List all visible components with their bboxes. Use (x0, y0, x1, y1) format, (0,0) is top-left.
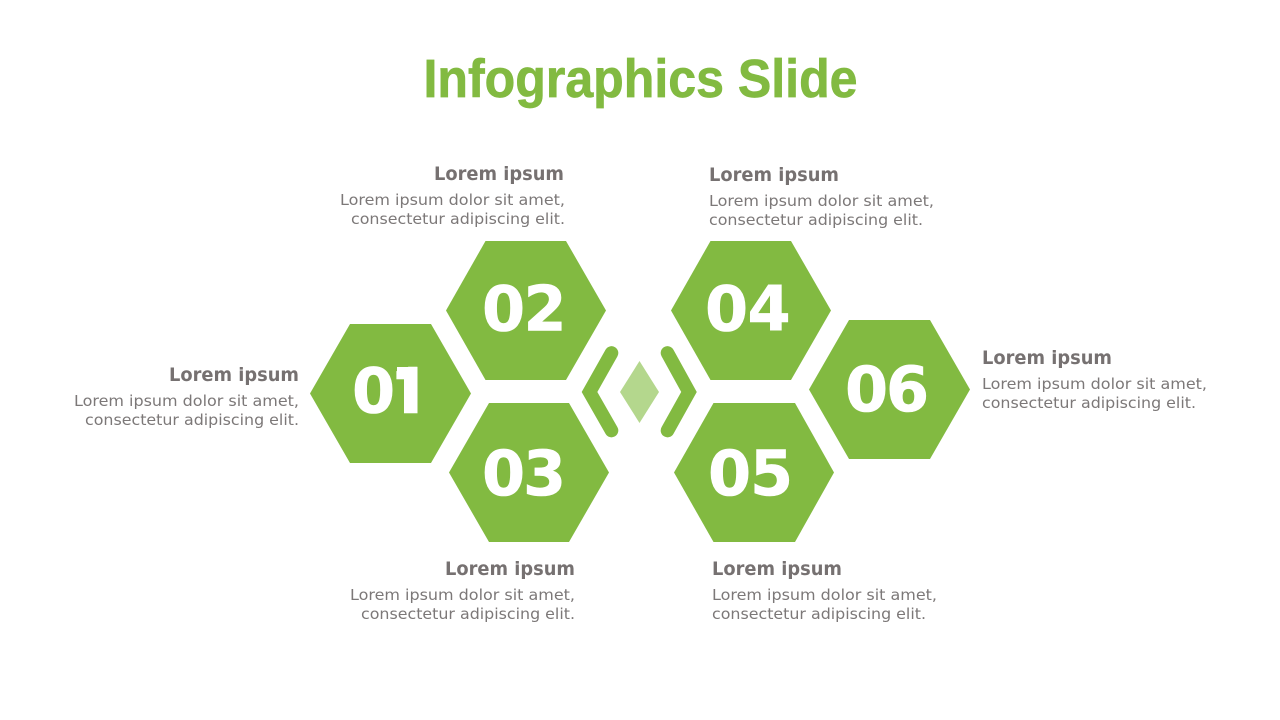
text block 03 (350, 559, 575, 623)
text block 05: Lorem ipsum (712, 559, 842, 580)
left chevron (590, 353, 612, 430)
text block 06: Lorem ipsum (982, 348, 1112, 369)
text block 06: Lorem ipsum dolor sit amet, (982, 375, 1207, 393)
text block 02: consectetur adipiscing elit. (351, 210, 565, 228)
text block 06: consectetur adipiscing elit. (982, 394, 1196, 412)
hexagon 06 (809, 320, 970, 459)
text block 02: Lorem ipsum (434, 164, 564, 185)
text block 04: Lorem ipsum (709, 165, 839, 186)
text block 01: Lorem ipsum dolor sit amet, (74, 392, 299, 410)
right chevron (668, 353, 689, 430)
hexagon 04 (671, 241, 831, 380)
text block 03: consectetur adipiscing elit. (361, 605, 575, 623)
text block 03: Lorem ipsum dolor sit amet, (350, 586, 575, 604)
text block 06 (982, 348, 1207, 412)
text block 04 (709, 165, 934, 229)
text block 01: consectetur adipiscing elit. (85, 411, 299, 429)
hexagon 02: 02 (482, 272, 567, 346)
hexagon 01 (310, 324, 471, 463)
hexagon 03: 03 (482, 437, 566, 510)
hexagon 01: 0 (352, 354, 395, 428)
hexagon 04: 04 (705, 272, 791, 346)
text block 01 (74, 365, 299, 429)
text block 05: consectetur adipiscing elit. (712, 605, 926, 623)
hexagon 03 (449, 403, 609, 542)
text block 01: Lorem ipsum (169, 365, 299, 386)
text block 02: Lorem ipsum dolor sit amet, (340, 191, 565, 209)
text block 04: Lorem ipsum dolor sit amet, (709, 192, 934, 210)
hexagon 05 (674, 403, 834, 542)
title: Infographics Slide (424, 49, 858, 109)
hexagon 02 (446, 241, 606, 380)
hexagon 06: 06 (845, 353, 929, 426)
center diamond (620, 361, 659, 423)
text block 05 (712, 559, 937, 623)
hexagon 01: 1 (391, 340, 429, 430)
text block 05: Lorem ipsum dolor sit amet, (712, 586, 937, 604)
hexagon 05: 05 (708, 437, 793, 510)
text block 04: consectetur adipiscing elit. (709, 211, 923, 229)
text block 03: Lorem ipsum (445, 559, 575, 580)
text block 02 (340, 164, 565, 228)
